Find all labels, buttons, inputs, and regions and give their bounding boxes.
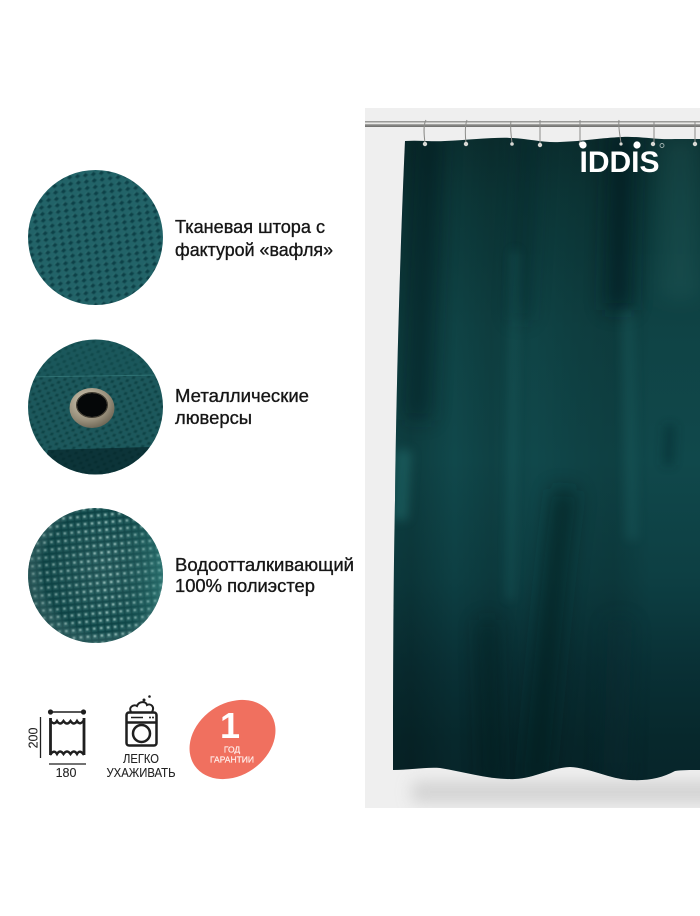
curtain rod: [365, 121, 700, 127]
text: water repellent: Водоотталкивающий: [175, 554, 354, 575]
icon: washing machine: [126, 695, 156, 746]
curtain hooks and grommets: [423, 120, 697, 147]
icon: size 180x200: [26, 709, 86, 780]
label: 180: 180: [56, 766, 76, 780]
label: easy care: ЛЕГКО: [123, 752, 159, 766]
badge: 1 year warranty: [174, 684, 291, 795]
text: waffle texture line 2: фактурой «вафля»: [175, 239, 333, 260]
text: grommets: Металлические: [175, 385, 309, 406]
icon: grommet: [70, 388, 114, 428]
text: grommets line 2: люверсы: [175, 407, 252, 428]
badge: 1 year warranty: ГОД: [224, 744, 240, 754]
floor shadow: [412, 782, 700, 802]
icon: curtain on rod: [48, 709, 86, 755]
panel: metal grommet photo: [28, 340, 163, 474]
text: waffle texture: Тканевая штора с: [175, 216, 325, 237]
text: polyester: 100% полиэстер: [175, 575, 315, 596]
label: easy care: УХАЖИВАТЬ: [106, 766, 176, 780]
label: 200: 200: [26, 728, 40, 748]
badge: 1 year warranty: ГАРАНТИИ: [210, 754, 254, 764]
curtain fabric: [385, 130, 700, 785]
label: easy care: [106, 752, 176, 780]
logo: IDDIS: IDDIS: [580, 146, 660, 179]
panel: curtain photo: [365, 108, 700, 808]
badge: 1 year warranty: 1: [220, 705, 240, 746]
panel: waffle texture photo: [28, 170, 163, 305]
panel: water repellent photo: [28, 508, 163, 643]
